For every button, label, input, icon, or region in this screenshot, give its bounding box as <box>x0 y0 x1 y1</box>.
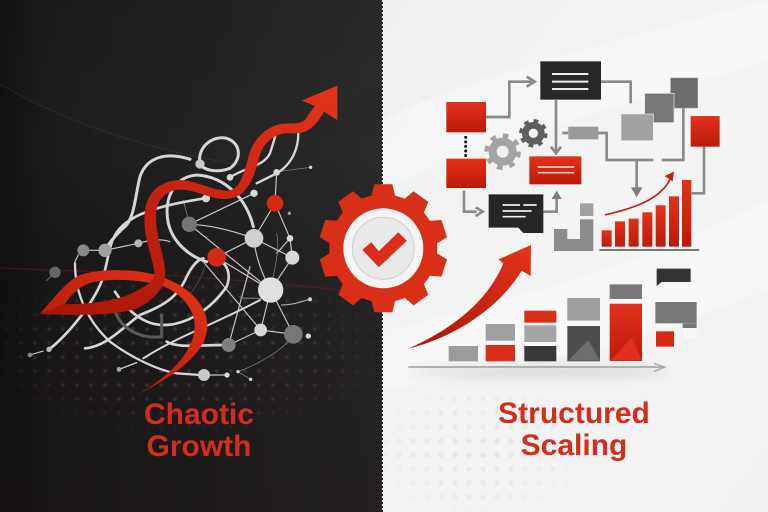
structured flowchart <box>446 61 720 251</box>
small bar chart <box>599 180 699 250</box>
network nodes <box>28 159 312 381</box>
heading: Chaotic Growth <box>144 398 254 463</box>
red center box with lines <box>529 156 581 184</box>
flow connectors <box>464 77 704 216</box>
gear white ring <box>343 208 423 288</box>
baseline arrow <box>408 363 665 371</box>
icon: light gear <box>487 136 519 168</box>
panel: light right background <box>383 0 768 512</box>
thin network links <box>75 172 310 375</box>
small gray node <box>568 127 598 139</box>
heading: Structured Scaling: Structured <box>498 397 650 430</box>
large red growth arrow <box>408 245 531 349</box>
gray stacked squares <box>621 78 698 141</box>
red network nodes <box>207 195 283 267</box>
dotted center divider <box>382 0 384 512</box>
stacked bar 2 <box>486 324 515 361</box>
structured growth chart <box>408 245 697 371</box>
stacked bar 4 <box>567 298 600 361</box>
gear inner disc <box>352 217 414 279</box>
dark box with lines <box>540 61 601 100</box>
gray block shape <box>554 203 593 251</box>
dotted link <box>461 137 470 156</box>
small trend arrow <box>605 172 674 215</box>
panel: dark left background <box>0 0 383 512</box>
heading: Chaotic Growth: Growth <box>146 430 252 463</box>
heading: Structured Scaling: Scaling <box>521 429 627 462</box>
gear body <box>318 184 448 312</box>
red start box <box>446 102 486 132</box>
red second box <box>446 159 486 188</box>
dark gray curve <box>113 300 162 337</box>
icon: dark gear <box>521 121 546 146</box>
central gear with checkmark <box>318 184 448 312</box>
red right box <box>691 116 720 147</box>
heading: Chaotic Growth: Chaotic <box>144 398 254 431</box>
arrowheads <box>552 187 642 199</box>
faint links <box>47 167 311 379</box>
checkmark <box>362 232 407 267</box>
red ribbon lower loop <box>40 270 207 395</box>
stacked bar 3 <box>524 311 556 361</box>
heading: Structured Scaling <box>498 397 650 462</box>
dark speech box <box>489 194 543 233</box>
stacked bar 1 <box>449 346 478 361</box>
floating blocks <box>655 269 697 347</box>
chaotic network illustration <box>28 86 337 395</box>
thick tangled curves <box>30 132 298 375</box>
stacked bar 5 <box>610 284 642 361</box>
red chaotic growth arrow <box>40 86 337 315</box>
